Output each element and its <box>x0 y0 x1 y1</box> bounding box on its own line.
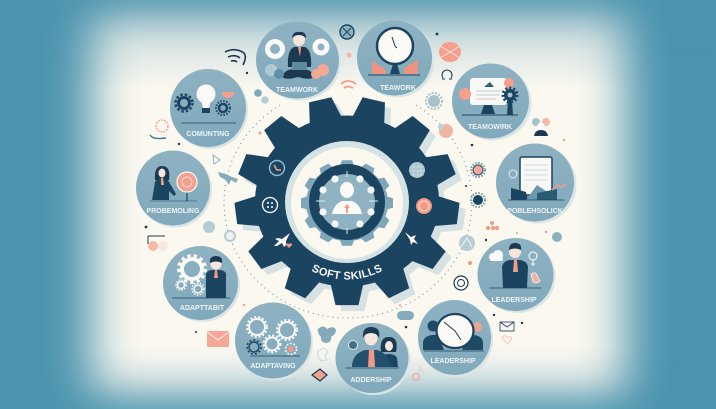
icon: clock <box>436 314 474 348</box>
central gear <box>234 97 466 312</box>
icon: coral arrow <box>552 184 567 190</box>
icon: people cluster <box>532 118 550 136</box>
icon: target <box>177 172 197 201</box>
gear shadow <box>240 102 466 311</box>
label: LEADERSHIP <box>491 297 537 304</box>
icon: presentation board <box>470 78 507 114</box>
label: ADDERSHIP <box>350 377 392 384</box>
icon: small gears <box>254 89 269 104</box>
icon: white gears <box>176 256 206 295</box>
icon: coral dots <box>486 221 499 230</box>
icon: bird <box>405 232 418 245</box>
panel: adaptaving gears <box>235 302 313 380</box>
icon: arms-crossed man <box>502 243 528 288</box>
label: LEADERSHIP <box>430 358 476 365</box>
icon: buildings <box>511 185 557 200</box>
icon: man <box>352 327 390 367</box>
icon: flower <box>346 52 352 58</box>
icon: teal badge gear <box>471 193 485 207</box>
gear body <box>234 96 460 305</box>
icon: standing man <box>206 256 226 298</box>
icon: spiral <box>348 340 358 350</box>
icon: clock badge <box>270 160 284 176</box>
icon: pale disc <box>459 235 475 251</box>
icon: coral gear <box>438 124 453 138</box>
dotted orbit ring <box>224 105 472 318</box>
icon: coral hands <box>265 64 329 79</box>
icon: globe badge <box>409 162 425 178</box>
panel: addership people <box>336 323 410 395</box>
icon: coral dome <box>222 92 234 98</box>
panel: problem solving clipboard <box>496 144 576 224</box>
icon: triangle <box>213 155 220 164</box>
panel: teamwork meditating <box>256 22 341 100</box>
panel: adapttabit gear and man <box>163 246 240 322</box>
icon: blue pill <box>397 311 414 320</box>
icon: coral badge <box>416 198 432 214</box>
icon: coral note <box>412 367 424 380</box>
gear label: SOFT SKILLS: SOFT SKILLS <box>312 264 382 280</box>
inner light gear <box>301 160 393 246</box>
icon: wifi coral <box>341 81 356 88</box>
icon: knot <box>442 70 452 79</box>
panel: teawork clock <box>357 20 434 98</box>
icon: outline blocks <box>318 348 328 361</box>
decorative icons <box>145 25 565 381</box>
label: TEAMWORK <box>276 87 318 94</box>
icon: wifi dark <box>225 50 245 65</box>
icon: speech bubbles <box>265 38 330 59</box>
panel: teamowirk presentation <box>452 64 532 140</box>
icon: blue swirl <box>318 326 336 343</box>
icon: coral cloud <box>148 236 168 251</box>
gear hub <box>285 141 409 263</box>
icon: spiral <box>509 170 517 178</box>
icon: plane <box>274 233 290 247</box>
icon: dark gears <box>176 94 230 115</box>
icon: lightbulb <box>196 84 216 113</box>
icon: pale coral loops <box>502 336 512 344</box>
icon: pale gear disc <box>203 221 215 233</box>
icon: dark gear <box>503 88 517 115</box>
label: COMUNTING <box>186 131 230 138</box>
icon: envelope badge <box>312 369 327 381</box>
inner dark ring with dots <box>314 169 380 235</box>
icon: envelopes <box>372 60 418 74</box>
icon: woman <box>381 337 398 367</box>
label: TEAWORK <box>380 85 416 92</box>
icon: pale ring gear <box>225 231 235 241</box>
icon: target <box>454 276 468 290</box>
icon: coral x <box>439 42 461 62</box>
icon: target <box>529 252 537 266</box>
label: POBLEHSOLICK <box>507 208 563 215</box>
icon: people <box>423 320 483 350</box>
scattered dots <box>145 33 565 333</box>
icon: coral dots <box>459 78 514 100</box>
icon: gem <box>552 232 562 242</box>
icon: blue bird <box>218 172 238 185</box>
icon: cloud <box>489 250 503 261</box>
panel: leadership man <box>478 238 556 313</box>
label: ADAPTTABIT <box>180 305 225 312</box>
label: PROBEMOLING <box>147 208 200 215</box>
icon: woman <box>152 166 176 200</box>
icon: small dark envelope <box>500 322 514 331</box>
icon: clock <box>377 28 413 74</box>
icon: grid badge <box>262 198 278 212</box>
icon: envelope <box>207 331 229 347</box>
label: ADAPTAVING <box>250 363 296 370</box>
panel: problem solving woman <box>136 150 212 228</box>
icon: x badge <box>340 25 354 39</box>
icon: gear cluster <box>247 317 297 354</box>
label: TEAMOWIRK <box>468 124 512 131</box>
icon: clipboard <box>520 157 552 195</box>
icon: person <box>332 182 362 214</box>
icon: coral item <box>531 273 540 283</box>
icon: seated man <box>282 32 314 79</box>
icon: gray gear <box>426 93 442 109</box>
panel: communting lightbulb <box>170 69 248 149</box>
icon: heart <box>286 243 292 248</box>
icon: coral ring loop <box>150 120 168 139</box>
panel: leadership clock <box>418 300 493 377</box>
icon: dark badge gear <box>471 163 485 177</box>
